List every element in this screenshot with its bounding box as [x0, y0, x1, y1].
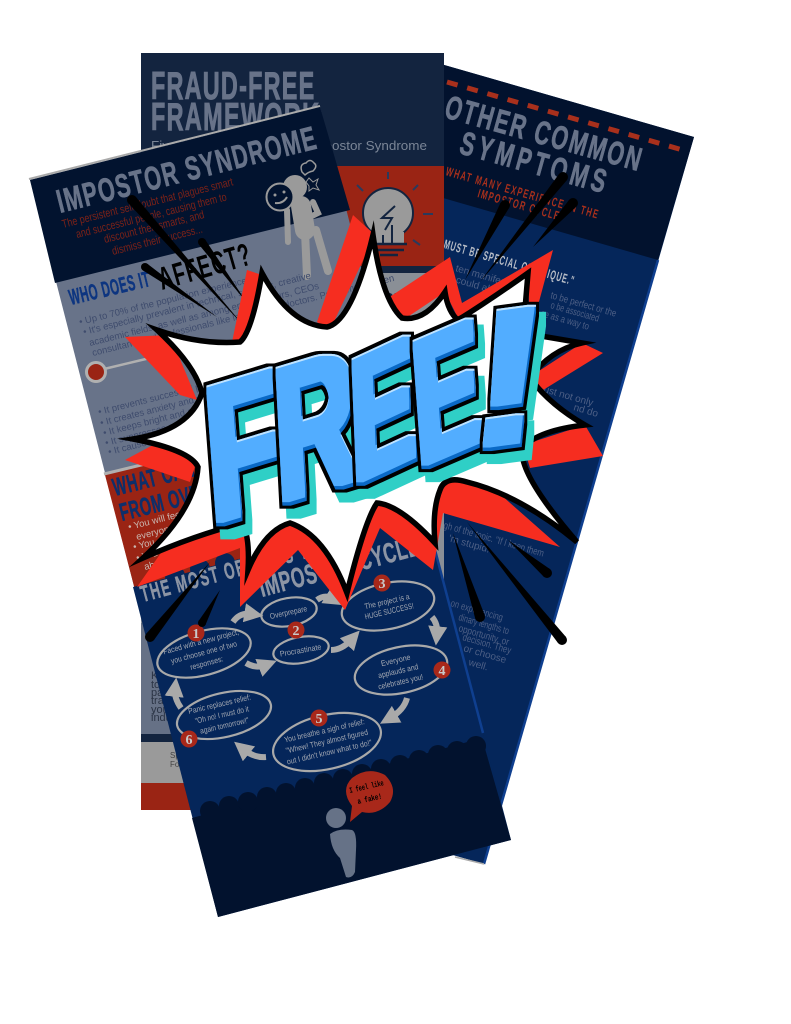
- number badges: 4: [438, 664, 446, 679]
- heading: what can: WHAT CAN: [110, 456, 197, 502]
- symptom heading: MUST BE SPECIAL OR UNIQUE.": [442, 238, 575, 289]
- panel: impostor cycle: [133, 510, 511, 917]
- cycle text: "Oh no! I must do it: [194, 704, 250, 726]
- body text: t could also: [449, 273, 501, 298]
- panel: fraud-free framework: [141, 53, 444, 810]
- body text: [151, 670, 172, 724]
- headline: free!: E: [348, 299, 419, 523]
- cycle text: celebrates you!: [377, 672, 424, 691]
- starburst: red backing: [125, 215, 603, 610]
- footer text: Sp: [170, 751, 180, 760]
- heading: impostor cycle: THE MOST OBVIOUS TO: [138, 534, 321, 607]
- cycle text: out I didn't know what to do!": [286, 738, 373, 766]
- bullet list: who it affects: • It's especially prevalent in technical, scientific, creative: [82, 271, 312, 338]
- number badges: [180, 574, 450, 748]
- bullet list: red section: ab: [143, 560, 156, 573]
- intro text: [61, 176, 235, 258]
- body text: decision. They: [461, 632, 512, 657]
- number badges: 2: [292, 624, 300, 639]
- footer text: [170, 751, 180, 769]
- cycle text: Panic replaces relief:: [187, 693, 252, 716]
- audience silhouette: [192, 736, 511, 917]
- body text: gh of the topic. "If I keep them: [442, 520, 545, 560]
- body text: ten manifested: [454, 263, 520, 292]
- headline: free!: F: [199, 328, 291, 566]
- illustration: person with mask: [266, 160, 328, 276]
- cycle text: Everyone: [380, 653, 412, 668]
- cycle text: you choose one of two: [170, 639, 238, 666]
- number badges: 5: [316, 712, 322, 727]
- bullet list: effects: • It causes stress: [107, 430, 180, 458]
- figure: lone person: [326, 808, 356, 877]
- cycle text: Faced with a new project,: [162, 627, 240, 656]
- heading: other common symptoms: OTHER COMMON: [441, 88, 646, 178]
- bullet list: red section: • You: [132, 537, 156, 553]
- speech bubble: i feel like a fake: I feel like: [349, 779, 385, 796]
- starburst: white comic explosion: [133, 235, 585, 593]
- cycle text: You breathe a sigh of relief:: [283, 717, 365, 744]
- headline: free!: R: [270, 309, 362, 545]
- cycle text: applauds and: [377, 662, 419, 680]
- heading: who does it: WHO DOES IT: [66, 266, 152, 310]
- speed lines: [127, 172, 578, 645]
- bullet list: red section: everyone: [135, 523, 176, 543]
- title: impostor syndrome: IMPOSTOR SYNDROME: [53, 119, 320, 220]
- body text: o be associated: [549, 300, 600, 325]
- timeline node: [86, 358, 150, 382]
- body text: Ki: [151, 670, 161, 682]
- panel: impostor syndrome: [29, 106, 425, 590]
- number badges: 6: [186, 733, 192, 748]
- body text: to: [151, 679, 160, 691]
- subheading: WHAT MANY EXPERIENCE IN THE: [444, 166, 599, 222]
- bullet list: red section: • You: [135, 548, 159, 564]
- body text: 'm stupid.: [447, 533, 491, 556]
- bullet list: red section: [127, 505, 200, 573]
- section text: se: SE: [383, 291, 405, 308]
- body text: ce as a way to: [539, 308, 591, 333]
- heading: impostor cycle: [138, 530, 422, 607]
- bullet list: effects: • It suppresses creativity: [104, 413, 207, 449]
- body text: you: [151, 704, 169, 716]
- body text: dinary lengths to: [457, 612, 510, 637]
- cycle text: [162, 592, 424, 766]
- title: fraud-free framework: FRAMEWORK: [151, 95, 319, 138]
- body text: pa: [151, 687, 164, 699]
- body text: nd do: [572, 402, 600, 420]
- cycle text: responses:: [189, 654, 224, 672]
- bullet list: effects: • It keeps bright and capable: [102, 399, 221, 439]
- body text: on experiencing: [449, 598, 504, 624]
- bullet list: red section: • You will feel like: [127, 505, 200, 533]
- heading: other common symptoms: SYMPTOMS: [456, 124, 611, 200]
- heading: impostor cycle: IMPOSTOR CYCLE: [255, 530, 422, 603]
- bullet list: who it affects: academic fields, as well as among entrepreneurs, CEOs: [88, 281, 320, 349]
- subheading: IMPOSTOR CYCLE: [476, 188, 561, 224]
- body text: [442, 263, 618, 673]
- body text: ust not only: [542, 384, 594, 409]
- bullet list: who it affects: • Up to 70% of the population experiences: [78, 274, 253, 328]
- intro text: dismiss their success...: [111, 224, 204, 258]
- cycle text: "Whew! They almost figured: [285, 728, 369, 755]
- bullet list: effects: • It creates anxiety and pressure: [99, 385, 234, 429]
- dashed red line: [447, 82, 686, 151]
- scalloped top edge: [165, 553, 235, 586]
- body text: well.: [466, 657, 489, 673]
- footer text: Fo: [170, 760, 180, 769]
- intro text: and successful people, causing them to: [75, 192, 228, 241]
- intro text: discount their smarts, and: [103, 209, 206, 246]
- heading: what can: [110, 456, 214, 527]
- intro text: The persistent self-doubt that plagues smart: [61, 176, 235, 231]
- body text: opportunity, or: [457, 623, 511, 648]
- cycle ellipses: [152, 574, 452, 781]
- cycle text: The project is a: [364, 592, 411, 611]
- cycle text: Overprepare: [269, 604, 308, 621]
- body text: to be perfect or the: [549, 290, 618, 320]
- body text: indu: [151, 712, 172, 724]
- icon: light bulb: [357, 172, 433, 255]
- bullet list: effects: • It prevents successful people: [97, 376, 224, 418]
- body text: or choose: [462, 643, 508, 666]
- speech bubble: i feel like a fake: [346, 771, 393, 822]
- number badges: 1: [192, 627, 200, 642]
- heading: affect: AFFECT?: [154, 236, 255, 297]
- title: fraud-free framework: [151, 64, 319, 138]
- cycle text: HUGE SUCCESS!: [364, 601, 415, 621]
- title: fraud-free framework: FRAUD-FREE: [151, 64, 314, 107]
- cycle text: Procrastinate: [279, 642, 323, 659]
- speech bubble: i feel like a fake: a fake!: [357, 793, 383, 807]
- heading: what can: FROM OVER: [117, 478, 214, 527]
- bullet list: effects: [97, 376, 234, 458]
- bullet list: who it affects: consultants and professionals like lawyers and doctors. Pretty much, even: [91, 273, 396, 359]
- headline: free!: !: [462, 264, 557, 492]
- body text: tra: [151, 695, 165, 707]
- cycle text: again tomorrow!": [199, 716, 250, 736]
- subtitle: Five Steps to Overcoming Impostor Syndrome: [151, 138, 427, 153]
- panel: other common symptoms: [196, 54, 694, 864]
- headline: free!: [199, 264, 557, 566]
- cycle arrows: [175, 597, 437, 757]
- headline: free!: E: [407, 281, 487, 505]
- number badges: 3: [378, 577, 386, 592]
